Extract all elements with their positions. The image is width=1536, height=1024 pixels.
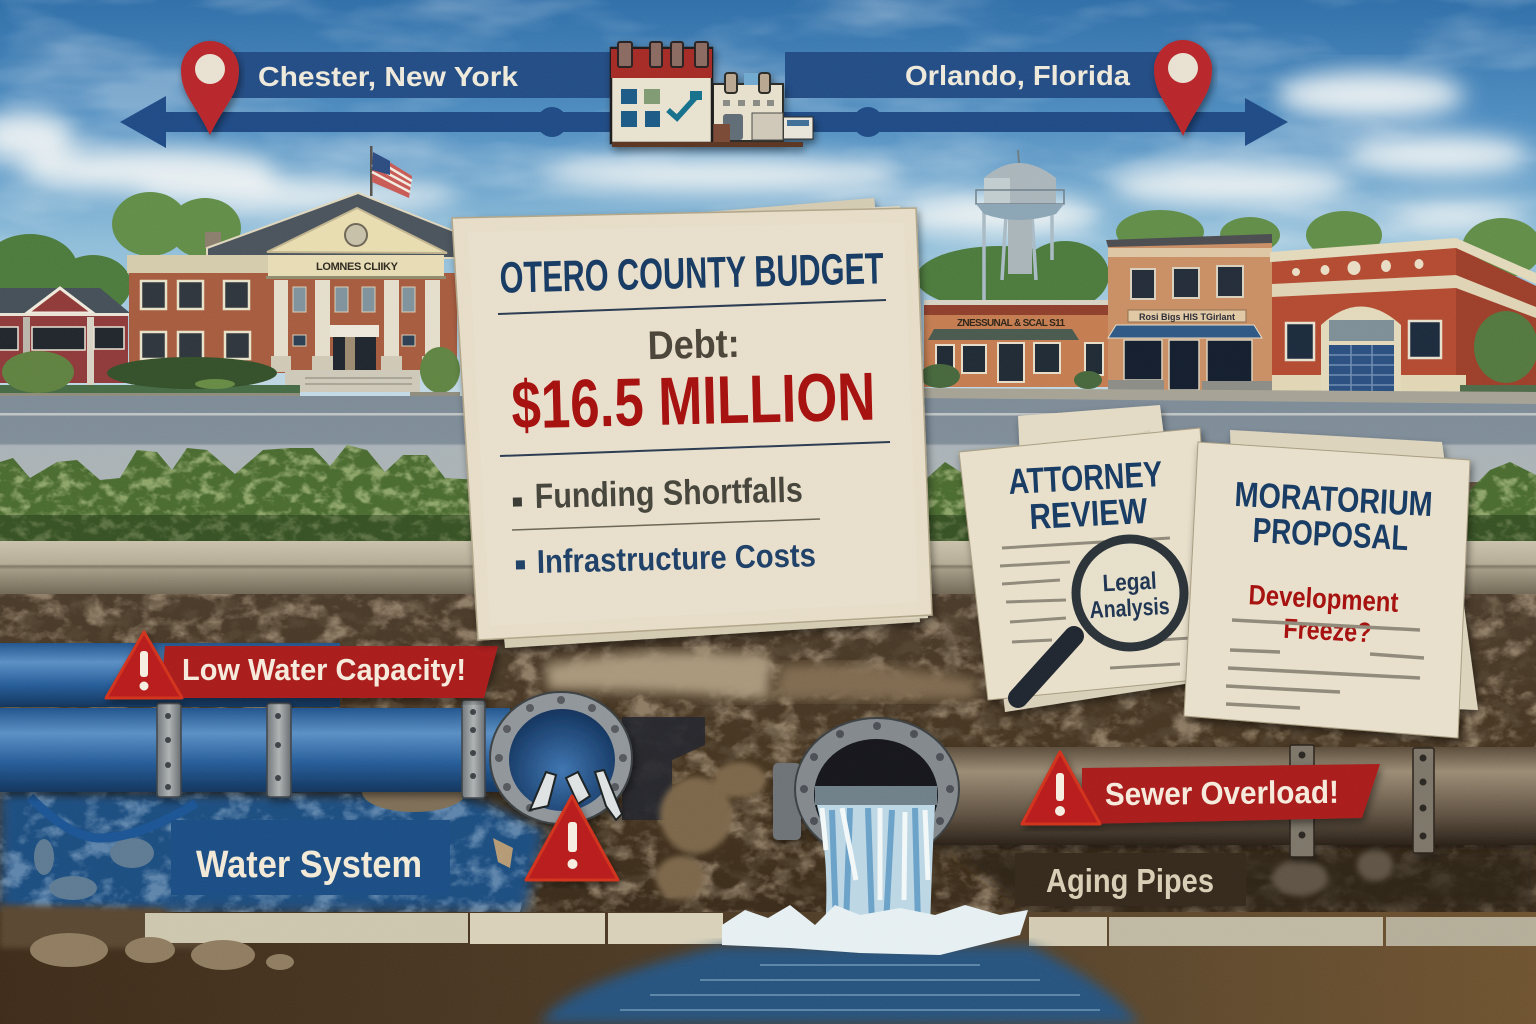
- upper curb: [0, 541, 1536, 596]
- building: county courthouse: [127, 193, 457, 392]
- icon: magnifying glass: Analysis: [1089, 593, 1170, 624]
- panel: attorney review: REVIEW: [1028, 490, 1148, 537]
- warning: sewer overload: [1022, 752, 1380, 824]
- soil: [0, 594, 1536, 916]
- water tower: [976, 150, 1064, 302]
- destination banner: [785, 52, 1170, 98]
- sewer pipe bands: [1290, 745, 1434, 857]
- route banner: [120, 40, 1288, 148]
- hedge: [0, 440, 1536, 542]
- label: water system: [171, 820, 450, 895]
- blue pipe: water system main: [0, 692, 632, 824]
- building: shopping strip: [920, 300, 1108, 389]
- budget heading: OTERO COUNTY BUDGET: [499, 244, 884, 303]
- courthouse name sign: LOMNES CLIIKY: [316, 261, 399, 273]
- icon: magnifying glass: [1018, 539, 1184, 698]
- upper blue water pipe: [0, 643, 340, 707]
- icon: American flag: [370, 146, 412, 198]
- development freeze: Development: [1248, 579, 1399, 618]
- panel: attorney review: [959, 405, 1216, 712]
- origin banner: [230, 52, 612, 98]
- bullet: infrastructure costs: Infrastructure Costs: [536, 536, 816, 580]
- origin banner: Chester, New York: [258, 61, 518, 92]
- warning: sewer overload: Sewer Overload!: [1105, 774, 1339, 812]
- store sign: Rosi Bigs HIS TGirlant: [1139, 312, 1235, 322]
- destination banner: Orlando, Florida: [905, 60, 1130, 91]
- sewage pool: [540, 946, 1140, 1024]
- panel: otero county budget: [452, 198, 932, 648]
- building: fire station: [1270, 238, 1536, 397]
- label: aging pipes: Aging Pipes: [1046, 862, 1214, 899]
- lower curb: [0, 905, 1536, 948]
- debt label: Debt:: [647, 322, 740, 368]
- magnifier text: Legal: [1102, 568, 1157, 597]
- icon: left map pin: [181, 41, 239, 135]
- ground rocks: [30, 933, 294, 970]
- debt amount: $16.5 MILLION: [511, 359, 876, 443]
- route arrow: [120, 96, 1288, 148]
- shrubs by courthouse: [0, 347, 460, 398]
- icon: right map pin: [1154, 40, 1212, 136]
- moratorium heading: MORATORIUM: [1234, 475, 1433, 524]
- waterfall from sewer: [722, 786, 1028, 955]
- road: [0, 388, 1536, 482]
- panel: moratorium proposal: PROPOSAL: [1252, 511, 1410, 558]
- icon: calendar with buildings: [611, 42, 813, 147]
- warning triangle: broken pipe: [526, 796, 618, 880]
- attorney heading: ATTORNEY: [1007, 453, 1163, 502]
- tree line: [0, 192, 1536, 315]
- label: aging pipes: [1015, 853, 1246, 906]
- warning: low water capacity: Low Water Capacity!: [182, 652, 466, 687]
- strip sign: ZNESSUNAL & SCAL S11: [957, 318, 1065, 329]
- warning: low water capacity: [106, 632, 498, 698]
- sewer opening: [773, 718, 959, 860]
- building: small red schoolhouse: [0, 288, 132, 385]
- pipe bands: [157, 700, 485, 798]
- panel: moratorium proposal: [1184, 430, 1478, 738]
- blue water-saturated ground: [0, 792, 550, 912]
- label: water system: Water System: [196, 844, 422, 886]
- bullet: funding shortfalls: Funding Shortfalls: [534, 471, 803, 516]
- brown sewer pipe: [773, 718, 1536, 860]
- building: main street store: [1106, 234, 1272, 393]
- panel: moratorium proposal: Freeze?: [1283, 613, 1372, 648]
- broken pipe opening: [490, 692, 632, 824]
- lower ground: [0, 912, 1536, 1024]
- sky background: [0, 0, 1536, 400]
